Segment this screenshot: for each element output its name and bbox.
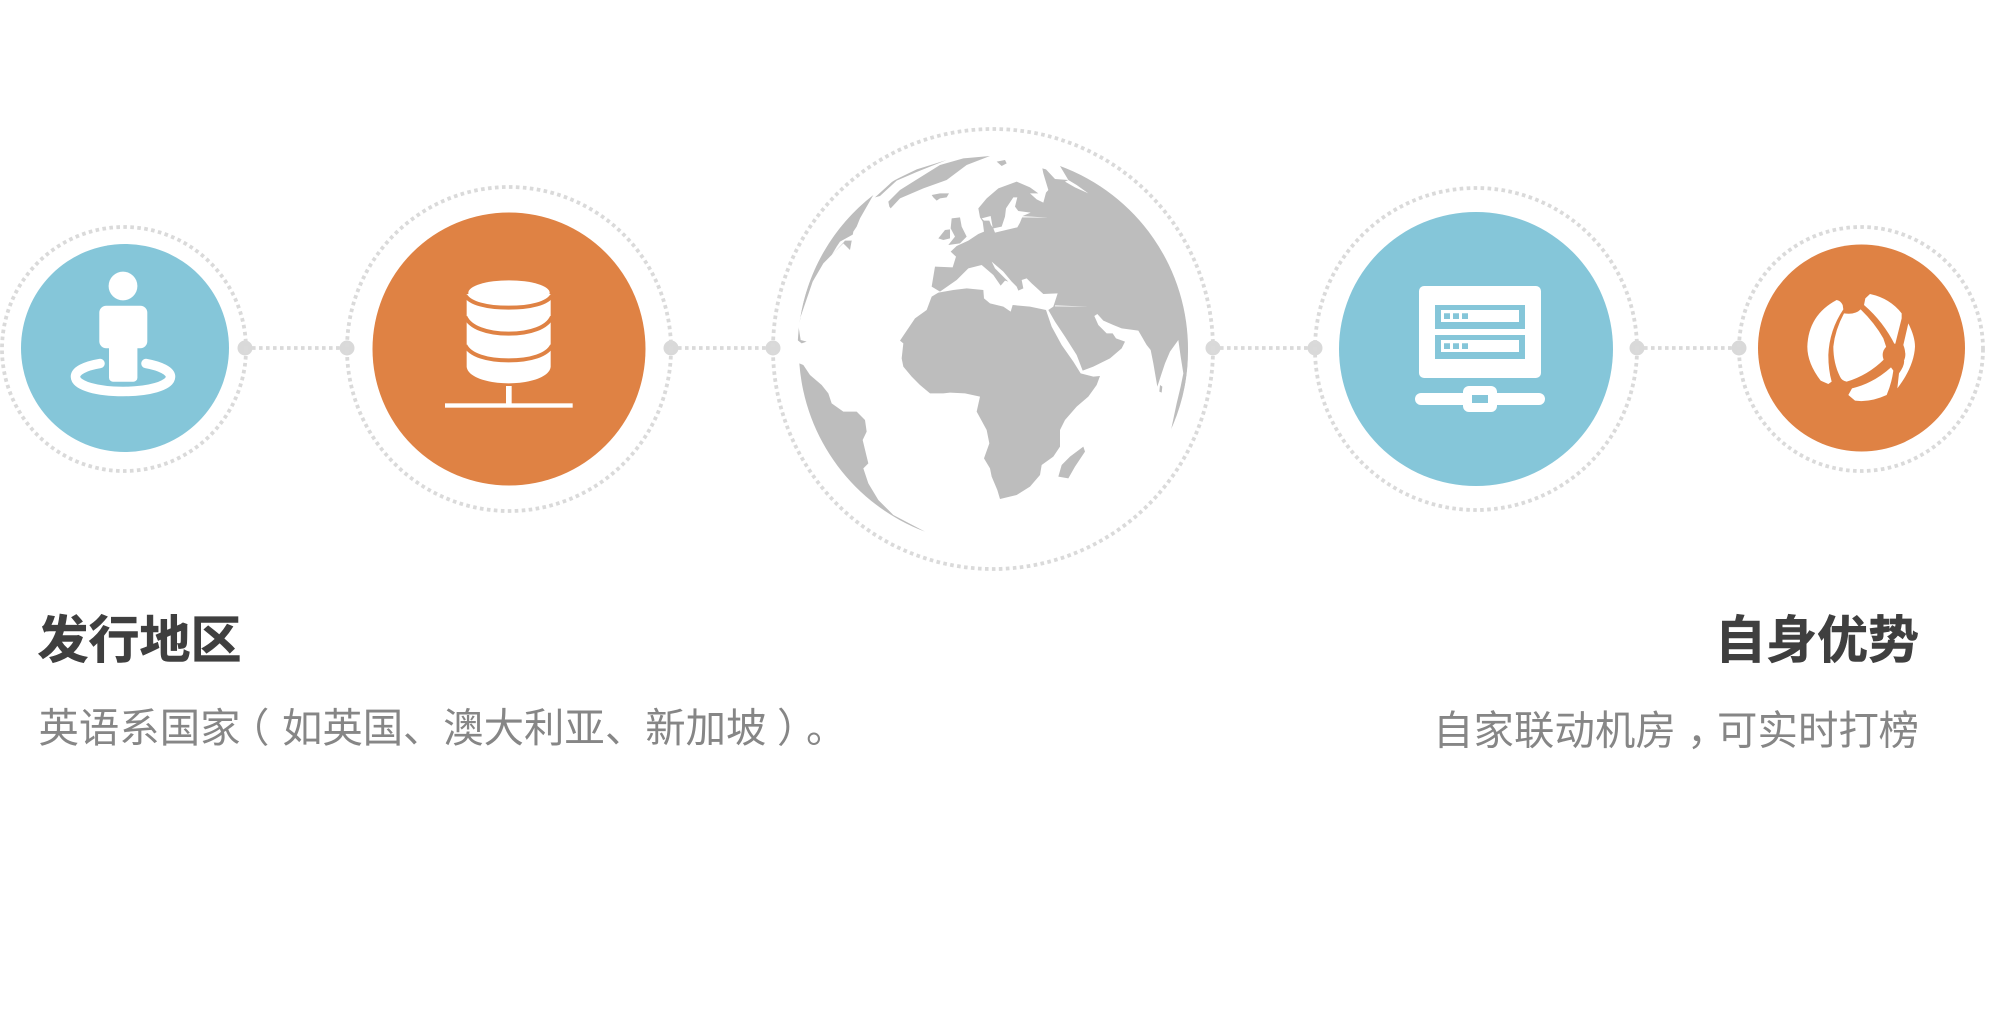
icon: network sphere [1807,294,1915,401]
connector: database to globe [664,340,780,356]
icon: person on location ring [75,272,171,392]
text: region description: 英语系国家（如英国、澳大利亚、新加坡）。 [38,705,846,751]
heading: advantages: 自身优势 [1715,612,1919,669]
connector: globe to server [1206,340,1322,356]
connector: server to network [1630,340,1746,356]
panel: server circle [1315,188,1637,510]
connector: person to database [238,340,354,356]
panel: database circle [347,187,671,511]
icon: server with network bar [1415,286,1545,412]
heading: region: 发行地区 [38,612,242,669]
panel: person location circle [2,227,246,471]
panel: world globe [773,129,1213,569]
map: earth continents [797,156,1188,532]
text: advantages description: 自家联动机房，可实时打榜 [1433,708,1919,754]
panel: network sphere circle [1739,227,1983,471]
icon: database with network bar [445,280,573,408]
